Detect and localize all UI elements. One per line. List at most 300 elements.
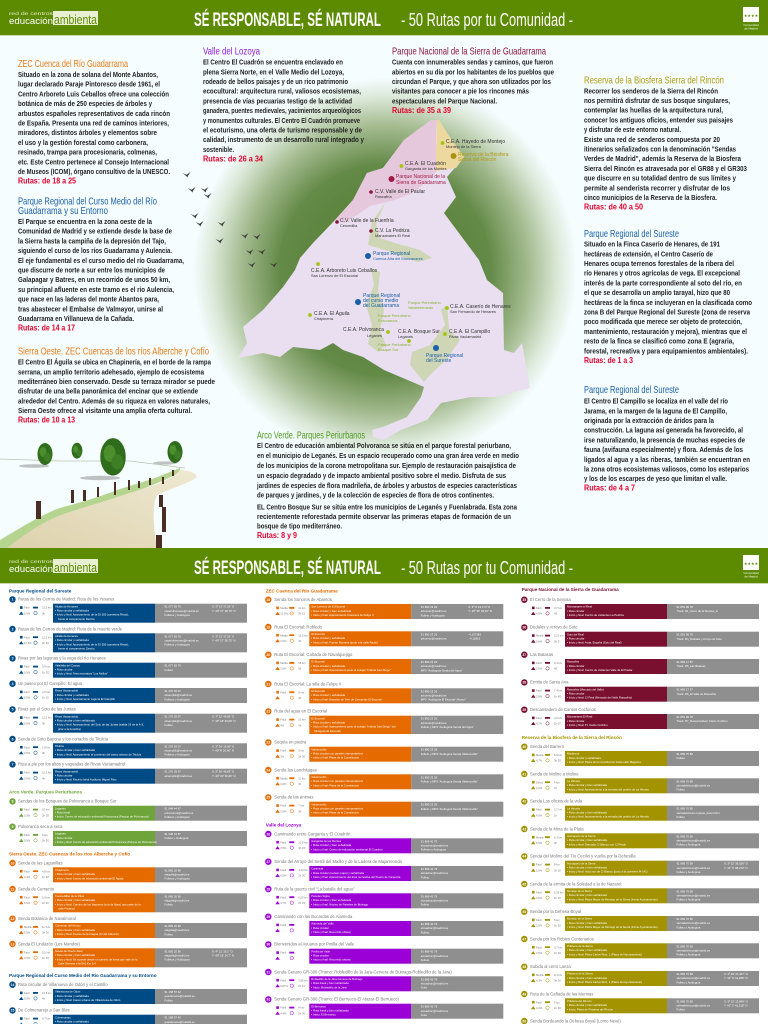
route 49: 91 869 70 58 bbox=[676, 999, 693, 1003]
map label: Reserva de la Biosfera: Sierra del Rincón bbox=[458, 157, 497, 163]
map label: Parque Periurbano Polvoranca bbox=[378, 313, 411, 323]
body text: el que se desarrolla un amplio tarayal, hizo que 80 bbox=[584, 288, 730, 297]
route 36: 11,5 km bbox=[554, 634, 564, 638]
heading: Arco Verde. Parques Periurbanos bbox=[257, 430, 365, 442]
route 20: ▪ Inicio y final: Aparcamiento junto al colegio "Infanta San Diego" bbox=[311, 668, 391, 672]
body text: abiertos en su día por los habitantes de los pueblos que bbox=[392, 67, 555, 76]
route 22: Fácil bbox=[280, 718, 286, 722]
route 28: 2h 15' bbox=[298, 901, 306, 905]
body text: conocer los antiguos oficios, entender sus paisajes bbox=[584, 115, 733, 124]
heading: Reserva de la Biosfera Sierra del Rincón bbox=[584, 75, 724, 87]
body text: y los de los escarpes de yeso que limitan el valle. bbox=[584, 474, 727, 483]
route 47 bbox=[521, 936, 759, 958]
logo: educación ambiental: educación bbox=[9, 564, 53, 574]
map label: C.E.A. Polvoranca bbox=[343, 327, 384, 338]
route 1: 91 677 83 79 bbox=[164, 605, 181, 609]
route 19: 91 890 23 26 bbox=[421, 632, 438, 636]
route 40: 4,7% bbox=[536, 759, 543, 763]
route 31 bbox=[265, 969, 503, 991]
route 20: 5h bbox=[298, 667, 302, 671]
logo: educación ambiental: educación bbox=[9, 16, 53, 26]
route 25: ▪ Ruta circular con paneles interpretativos bbox=[311, 807, 364, 811]
route 25: 25 bbox=[266, 796, 270, 800]
map label: Parque Periurbano Polvoranca: Parque Periurbano bbox=[378, 313, 411, 318]
route 1: Fácil bbox=[24, 606, 30, 610]
route 41: 4,0% bbox=[536, 786, 543, 790]
route 11: Folleto bbox=[164, 903, 173, 907]
route 37: 3,3 km bbox=[554, 661, 563, 665]
map label: C.V. Valle de la Fuenfría: Cercedilla bbox=[340, 223, 358, 228]
map label: C.E.A. Caserío de Henares: C.E.A. Caserío de Henares bbox=[450, 304, 511, 310]
section heading: Parque Regional del Sureste: Parque Regional del Sureste bbox=[9, 588, 72, 593]
route 27: 4,33 km bbox=[298, 868, 309, 872]
route 45: 6,35 km bbox=[554, 890, 564, 894]
route 23: 91 890 23 26 bbox=[421, 748, 438, 752]
route 49: 1h 30' bbox=[554, 1006, 562, 1010]
route 22 bbox=[265, 708, 503, 734]
body text: bosque de tipo mediterráneo. bbox=[257, 522, 342, 531]
route 26: ▪ Ruta circular y bien señalizada bbox=[311, 843, 352, 847]
route 11: 11 bbox=[11, 887, 14, 891]
route 21: 91 890 23 26 bbox=[421, 689, 438, 693]
route 37: Las Batasas bbox=[530, 652, 553, 657]
map label: Parque Regional Curso Medio bbox=[355, 293, 400, 309]
route 14 bbox=[9, 982, 247, 1004]
route 36: 36 bbox=[522, 626, 526, 630]
route 18: arboreto@madrid.es bbox=[421, 609, 447, 613]
routes: Rutas: de 35 a 39 bbox=[392, 106, 451, 115]
route 40: 91 869 70 58 bbox=[676, 752, 693, 756]
body text: el ecoturismo, una oferta de turismo responsable y de bbox=[203, 126, 363, 134]
route 35 bbox=[521, 596, 759, 619]
route 41: 41 bbox=[522, 772, 526, 776]
route 32: 2h 30' bbox=[298, 1011, 306, 1015]
route 31: 7,85 km bbox=[298, 978, 309, 982]
route 44: Senda del Molino del Tío Cecilio y vuelta por la Dehesilla bbox=[530, 854, 636, 859]
route 37: ▪ Inicio y final: Centro de visitantes Valle de El Paular bbox=[567, 668, 633, 672]
body text: disfrutar de una bella panorámica del encinar que se extiende bbox=[18, 387, 199, 396]
route 9: Fácil bbox=[24, 833, 30, 837]
route 39: Track: R7_Descansadero Canto Cochino bbox=[676, 719, 728, 723]
body text bbox=[584, 397, 750, 483]
route 35: Manzanares el Real bbox=[567, 605, 592, 609]
route 8: 2h 30' bbox=[42, 813, 50, 817]
route 2: caseriohenares@madrid.es bbox=[164, 638, 199, 642]
route 29: Alameda del Valle bbox=[311, 922, 334, 926]
route 42: sierradelrincon.org/que_hacer.html bbox=[676, 811, 720, 815]
route 46: Folleto y Audioguía bbox=[676, 925, 701, 929]
body text: el uso y la gestión forestal como carbonera, bbox=[18, 138, 148, 147]
route 19: El Escorial bbox=[311, 632, 325, 636]
route 14: ▪ Inicio y final: Casco urbano de Villaviciosa de Odón bbox=[55, 998, 121, 1002]
route 21: El Escorial bbox=[311, 689, 325, 693]
body text: serrana, un amplio territorio adehesado, ejemplo de ecosistema bbox=[18, 367, 205, 376]
route 44: 44 bbox=[522, 855, 526, 859]
route 18: Y: 40º 35' 45,46'' N bbox=[468, 609, 492, 613]
route 1: frente al campamento Zarzito. bbox=[58, 617, 95, 621]
route 47: Folleto y Audioguía bbox=[676, 953, 701, 957]
route 32: El Berrueco bbox=[311, 1004, 326, 1008]
route 45: 45 bbox=[522, 882, 526, 886]
route 2: Y: 40º 27' 38,75'' N bbox=[212, 638, 235, 642]
route 24: Folleto y MP3 "Audioguía Senda Valdemorillo" bbox=[421, 779, 478, 783]
route 21: 21 bbox=[266, 682, 270, 686]
route 15: De Colmenarejo a San Blas bbox=[18, 1008, 70, 1013]
tree bbox=[38, 443, 52, 465]
routes: Rutas: 8 y 9 bbox=[257, 531, 297, 540]
route 11: ▪ Inicio y final: Camino de los Vaqueros (a la ila Natal, que parte de la bbox=[55, 902, 141, 906]
route 38: 3,8% bbox=[536, 694, 543, 698]
route 27: Folleto bbox=[421, 875, 430, 879]
route 27: Canencia bbox=[311, 867, 324, 871]
body text: jardines de especies de flora madrileña, de árboles y arbustos de especies características bbox=[256, 481, 517, 490]
route 27: 1h 30' bbox=[298, 874, 306, 878]
body text: Centro Arboreto Luis Ceballos ofrece una colección bbox=[18, 89, 169, 98]
route 3: Fácil bbox=[24, 665, 30, 669]
route 24: 11 km bbox=[298, 776, 306, 780]
route 42: Fácil bbox=[536, 808, 542, 812]
route 49: 4,0% bbox=[536, 1006, 543, 1010]
map label: C.E.A. Polvoranca: C.E.A. Polvoranca bbox=[343, 327, 384, 333]
body text bbox=[392, 58, 555, 105]
route 39: 4,7% bbox=[536, 722, 543, 726]
logo: Comunidad de Madrid: Comunidad bbox=[743, 23, 759, 27]
route 14: Fácil bbox=[24, 991, 30, 995]
route 19: 4h bbox=[298, 639, 302, 643]
map label: Parque Nacional: Sierra de Guadarrama bbox=[396, 180, 446, 186]
route 6 bbox=[9, 736, 247, 758]
route 3: 0,5% bbox=[24, 670, 31, 674]
route 18: Senda los Sonoros de Abantos bbox=[274, 597, 332, 602]
route 38: 91 869 17 57 bbox=[676, 688, 693, 692]
route 8: 91 648 44 87 bbox=[164, 807, 181, 811]
route 7: 4h bbox=[42, 776, 45, 780]
route 11: Senda de Cemento bbox=[18, 886, 55, 891]
route 14: Folleto bbox=[164, 998, 173, 1002]
body text: contemplar las huellas de la arquitectura rural, bbox=[584, 106, 723, 115]
route 13 bbox=[9, 941, 247, 967]
route 45: sierradelrincon@madrid.es bbox=[676, 893, 711, 897]
route 50: Senda Bordeando la Dehesa Boyal (Lomo Nevé) bbox=[530, 1018, 621, 1023]
route 43: Media bbox=[536, 835, 544, 839]
route 20: 91 890 23 26 bbox=[421, 660, 438, 664]
routes: Rutas: de 40 a 50 bbox=[584, 203, 643, 212]
body text bbox=[256, 441, 519, 531]
route 7: elcampillo@madrid.es bbox=[164, 774, 193, 778]
route 41: sierradelrincon@madrid.es bbox=[676, 783, 711, 787]
route 6: Senda de Soto Bayona y los cortados de Titulcia bbox=[18, 736, 109, 741]
panel: Parque Regional del Sureste, El Campillo bbox=[584, 384, 750, 492]
route 5: 5 bbox=[12, 708, 14, 712]
route 32: 32 bbox=[266, 998, 270, 1002]
route 11: 5,9 km bbox=[42, 895, 51, 899]
body text: cinco municipios de la Reserva de la Biosfera. bbox=[584, 193, 717, 202]
route 8 bbox=[9, 798, 247, 821]
route 39: 4,6 km bbox=[554, 716, 563, 720]
route 12: 5,5% bbox=[24, 931, 31, 935]
route 15: Colmenarejo bbox=[55, 1015, 71, 1019]
route 30 bbox=[265, 941, 503, 964]
body text: Recorrer los senderos de la Sierra del Rincón bbox=[584, 86, 718, 95]
map label: Parque Periurbano Bosque Sur bbox=[378, 342, 411, 352]
route 35: ▪ Inicio y final: Centro de visitantes La Pedriza bbox=[567, 613, 624, 617]
route 1: Rutas de los Cerros de Madrid: Ruta de los Yesares bbox=[18, 597, 114, 602]
routes: Rutas: de 1 a 3 bbox=[584, 356, 633, 365]
route 2: 12,5 km bbox=[42, 635, 52, 639]
route 11: calle Paraíso) bbox=[58, 906, 75, 910]
route 23 bbox=[265, 739, 503, 762]
route 1: X: 3º 23' 37,29'' O bbox=[212, 605, 235, 609]
route 28: 9,25 km bbox=[298, 895, 309, 899]
route 6: 0,5% bbox=[24, 751, 31, 755]
route 45: Folleto y Audioguía bbox=[676, 898, 701, 902]
route 9: 9 km bbox=[42, 833, 49, 837]
route 37: ▪ Ruta circular bbox=[567, 664, 585, 668]
route 43: ▪ Ruta circular y bien señalizada bbox=[567, 838, 607, 842]
route 46: 5 km bbox=[554, 918, 561, 922]
route 32 bbox=[265, 996, 503, 1019]
logo: Comunidad de Madrid bbox=[743, 7, 759, 30]
route 30: ▪ Ruta circular bbox=[311, 954, 329, 958]
route 1: 3h bbox=[42, 611, 45, 615]
route 29: 91 869 42 79 bbox=[421, 922, 438, 926]
route 36 bbox=[521, 624, 759, 647]
heading: Parque Regional del Curso Medio del Río bbox=[18, 196, 157, 208]
route 43 bbox=[521, 826, 759, 848]
route 27: elcuadron@madrid.es bbox=[421, 871, 449, 875]
route 32: 4,4% bbox=[280, 1011, 287, 1015]
route 4: Rivas Vaciamadrid bbox=[55, 689, 79, 693]
route 26: ▪ Inicio y final: Centro de educación ambiental El Cuadrón bbox=[311, 847, 383, 851]
route 13: ▪ Inicio y final: Se accede desde un camino de tierra que sale de la bbox=[55, 957, 138, 961]
route 8: Sendas de los Bosques de Polvoranca a Bosque Sur bbox=[18, 799, 117, 804]
route 11: ▪ Ruta circular y bien señalizada bbox=[55, 898, 95, 902]
route 6: 6 bbox=[12, 737, 14, 741]
map label: C.E.A. El Campillo: Rivas Vaciamadrid bbox=[449, 334, 481, 339]
route 35: 4,5% bbox=[536, 612, 543, 616]
route 21: 6 km bbox=[298, 690, 305, 694]
logo: Comunidad de Madrid: Comunidad bbox=[743, 571, 759, 575]
route 8: Folletos y Audioguía bbox=[164, 815, 190, 819]
route 30: ▪ Inicio y final: Recorrido urbano bbox=[311, 958, 351, 962]
route 5: girar a la derecha) bbox=[58, 727, 81, 731]
route 22: Folleto y MP3 "Audioguía Senda del Agua" bbox=[421, 725, 474, 729]
route 35: 45' bbox=[554, 612, 558, 616]
route 11: 1h 30' bbox=[42, 901, 50, 905]
route 48: 3h 30' bbox=[554, 979, 562, 983]
route 10: 3,4% bbox=[24, 875, 31, 879]
route 23: ▪ Inicio y final: Plaza de la Constitución bbox=[311, 756, 360, 760]
route 22: El Escorial bbox=[311, 716, 325, 720]
route 31: 2h 15' bbox=[298, 984, 306, 988]
route 10: Fácil bbox=[24, 869, 30, 873]
route 11: Fresnedillas de la Oliva bbox=[55, 894, 85, 898]
subtitle: - 50 Rutas por tu Comunidad - bbox=[401, 10, 573, 30]
route 25: Valdemorillo bbox=[311, 802, 327, 806]
body text: sostenible. bbox=[203, 145, 234, 154]
body text: en el municipio de Leganés. Es un espacio recuperado como una gran área verde en medio bbox=[257, 451, 519, 460]
route 7: 7 bbox=[12, 763, 14, 767]
route 38: 1h 49' bbox=[554, 694, 562, 698]
logo: Comunidad de Madrid: de Madrid bbox=[744, 574, 758, 578]
route 31: 6,87% bbox=[280, 984, 289, 988]
route 44: 5,5% bbox=[536, 868, 543, 872]
route 18: ▪ Ruta circular y bien señalizada bbox=[311, 609, 352, 613]
route 41: La Hiruela bbox=[567, 779, 580, 783]
route 22: 10 km bbox=[298, 718, 306, 722]
route 20: Ruta El Escorial: Cañada de Navalquejigo bbox=[274, 652, 353, 657]
body text: Guadarrama en Villanueva de la Cañada. bbox=[18, 314, 134, 323]
route 18: 11 km bbox=[298, 606, 306, 610]
map label: C.E.A. Bosque Sur: Leganés bbox=[398, 334, 413, 339]
route 6: Fácil bbox=[24, 745, 30, 749]
route 36: 3,6% bbox=[536, 639, 543, 643]
route 41: Difícil bbox=[536, 780, 543, 784]
route 36: Soto del Real bbox=[567, 632, 584, 636]
route 12: ▪ Ruta circular y bien señalizada bbox=[55, 928, 95, 932]
route 40: 3h 30' bbox=[554, 759, 562, 763]
panel: Parque Regional del Curso Medio bbox=[18, 196, 184, 333]
body text: resto de la finca se clasificó como zona E (agraria, bbox=[584, 337, 734, 346]
route 20: 2,0% bbox=[280, 667, 287, 671]
header: first page bbox=[0, 0, 768, 36]
route 5: Rivas por el Soto de las Juntas bbox=[18, 707, 76, 712]
route 45: 3,0% bbox=[536, 896, 543, 900]
route 18 bbox=[265, 596, 503, 619]
route 43: Senda de la Mina de la Plata bbox=[530, 826, 584, 831]
route 44: X: 3º 32' 36,026'' O bbox=[724, 862, 749, 866]
map label: Parque Regional del Sureste: Parque Regional bbox=[426, 353, 463, 359]
route 18: 18 bbox=[266, 598, 270, 602]
route 37: Rascafría bbox=[567, 660, 579, 664]
route 7: ▪ Inicio y final: Recinto ferial Auditorio Miguel Ríos bbox=[55, 778, 117, 782]
route 42 bbox=[521, 798, 759, 821]
route 48: X: 3º 29' 47,447'' O bbox=[724, 972, 749, 976]
route 13: 5,5 km bbox=[42, 950, 51, 954]
route 23: Valdemorillo bbox=[311, 747, 327, 751]
route 31: Fácil bbox=[280, 978, 286, 982]
heading: Parque Regional del Sureste bbox=[584, 228, 679, 240]
route 2: Alcalá de Henares bbox=[55, 634, 78, 638]
route 36: Dedales y Arroyo de Soto bbox=[530, 625, 578, 630]
panel: Sierra Oeste bbox=[18, 346, 216, 425]
route 46: ▪ Inicio y final: Plaza Mayor de Montejo de la Sierra (frente Ayuntamiento) bbox=[567, 925, 658, 929]
logo: educación ambiental: red de centros bbox=[9, 559, 53, 564]
route 1: 12,5 km bbox=[42, 606, 52, 610]
route 19 bbox=[265, 624, 503, 646]
route 28: 91 869 42 79 bbox=[421, 894, 438, 898]
route 6: Folletos y Audioguía bbox=[164, 753, 190, 757]
route 2 bbox=[9, 626, 247, 652]
body text: EL Centro Bosque Sur se sitúa entre los municipios de Leganés y Fuenlabrada. Esta zona bbox=[257, 502, 518, 511]
route 8: 0,5% bbox=[24, 813, 31, 817]
map label: C.E.A. El Campillo: C.E.A. El Campillo bbox=[449, 329, 490, 335]
map label: C.E.A. El Cuadrón: C.E.A. El Cuadrón bbox=[405, 161, 446, 167]
route 42: Senda Los oficios de la vida bbox=[530, 799, 583, 804]
logo: educación ambiental bbox=[9, 559, 98, 575]
flock of birds bbox=[182, 172, 278, 268]
route 47: ▪ Inicio y final: Plaza Carlos Ruiz, 1 (Plaza del Ayuntamiento) bbox=[567, 952, 642, 956]
route 20: El Escorial bbox=[311, 660, 325, 664]
route 43: 6,3 km bbox=[554, 835, 563, 839]
route 48: sierradelrincon@madrid.es bbox=[676, 976, 711, 980]
route 41: ▪ Inicio y final: Aparcamiento a la entrada del pueblo de La Hiruela bbox=[567, 787, 649, 791]
body text: El Parque se encuentra en la zona oeste de la bbox=[18, 217, 153, 226]
route 1: Y: 40º 27' 38,75'' N bbox=[212, 609, 235, 613]
body text: botánica de más de 250 especies de árboles y bbox=[18, 99, 153, 108]
green glow behind map bbox=[193, 78, 577, 462]
body text: espectaculares del Parque Nacional. bbox=[392, 96, 497, 105]
map label: C.V. Valle de El Paular: Rascafría bbox=[375, 194, 392, 199]
body text: lugar declarado Paraje Pintoresco desde 1961, el bbox=[18, 80, 160, 89]
route 46: Montejo de la Sierra bbox=[567, 917, 592, 921]
route 11: 91 865 20 90 bbox=[164, 894, 181, 898]
route 21 bbox=[265, 681, 503, 703]
route 43: 2h bbox=[554, 841, 557, 845]
route 26: Caminando entre Garganta y El Cuadrón bbox=[274, 831, 351, 836]
route 27: 91 869 42 79 bbox=[421, 867, 438, 871]
route 4: 1h 15' bbox=[42, 696, 50, 700]
route 18: Media bbox=[280, 606, 288, 610]
body text: y disfrutar de este entorno natural. bbox=[584, 125, 681, 134]
heading line two: Guadarrama y su Entorno bbox=[18, 205, 108, 217]
map label: C.E.A. Caserío de Henares bbox=[445, 304, 511, 314]
route 13: elaguila@madrid.es bbox=[164, 953, 190, 957]
section heading: ZEC Cuenca del Río Guadarrama: ZEC Cuenca del Río Guadarrama bbox=[266, 588, 338, 593]
route 13: Calle Serrana a M-541 Km 6,4 bbox=[58, 961, 96, 965]
route 9: 91 648 44 87 bbox=[164, 832, 181, 836]
route 21: ▪ Inicio y final: Estación de Tren de Cercanías El Escorial bbox=[311, 697, 382, 701]
routes: Rutas: de 14 a 17 bbox=[18, 324, 75, 333]
route 45: ▪ Ruta circular y bien señalizada bbox=[567, 893, 607, 897]
route 25 bbox=[265, 794, 503, 817]
route 31: Robledillo de la Jara-Cervera de Buitrago bbox=[311, 977, 363, 981]
route 29 bbox=[265, 914, 503, 936]
map label: Parque Periurbano Bosque Sur: Bosque Sur bbox=[378, 347, 399, 352]
route 12: Colmenar del Arroyo bbox=[55, 924, 81, 928]
route 43: sierradelrincon@madrid.es bbox=[676, 838, 711, 842]
route 19: ▪ Ruta circular y señalizada bbox=[311, 636, 346, 640]
route 11: elaguila@madrid.es bbox=[164, 898, 190, 902]
map label: Parque Nacional: Parque Nacional de la bbox=[396, 174, 445, 180]
route 39: 91 853 99 78 bbox=[676, 715, 693, 719]
body text: de los municipios de la corona metropolitana sur. Ejemplo de restauración paisajística de bbox=[257, 461, 517, 470]
route 43: Horcajuelo de la Sierra bbox=[567, 834, 596, 838]
heading: Parque Regional del Sureste bbox=[584, 384, 679, 396]
route 15: guadarrama@madrid.es bbox=[164, 1020, 195, 1024]
route 13: ▪ Ruta circular y bien señalizada bbox=[55, 953, 95, 957]
route 48: 4,3% bbox=[536, 979, 543, 983]
route 49: Folleto bbox=[676, 1008, 685, 1012]
body text: presencia de vías pecuarias testigo de la actividad bbox=[203, 96, 352, 105]
route 10 bbox=[9, 860, 247, 882]
route 18: 10,5% bbox=[280, 612, 289, 616]
route 1: ▪ Inicio y final: Aparcamiento de la 35-200 (carretera Rivas), bbox=[55, 613, 129, 617]
route 9: 0,5% bbox=[24, 839, 31, 843]
body text: Existe una red de senderos compuesta por 20 bbox=[584, 135, 720, 144]
map label: C.V. La Pedriza bbox=[369, 228, 410, 238]
route 41: Senda de Molino a Molino bbox=[530, 771, 579, 776]
route 5: 12,5 km bbox=[42, 716, 52, 720]
body text bbox=[203, 58, 365, 154]
map label: C.E.A. Hayedo de Montejo: C.E.A. Hayedo de Montejo bbox=[446, 139, 505, 145]
route 24: ▪ Inicio y final: Plaza de la Constitución bbox=[311, 783, 360, 787]
route 6: ▪ Ruta circular y bien señalizada bbox=[55, 748, 95, 752]
route 40: Folleto bbox=[676, 756, 685, 760]
body text: de España. Presenta una red de caminos interiores, bbox=[18, 118, 169, 128]
route 29: Fácil bbox=[280, 923, 286, 927]
route 4: Fácil bbox=[24, 690, 30, 694]
